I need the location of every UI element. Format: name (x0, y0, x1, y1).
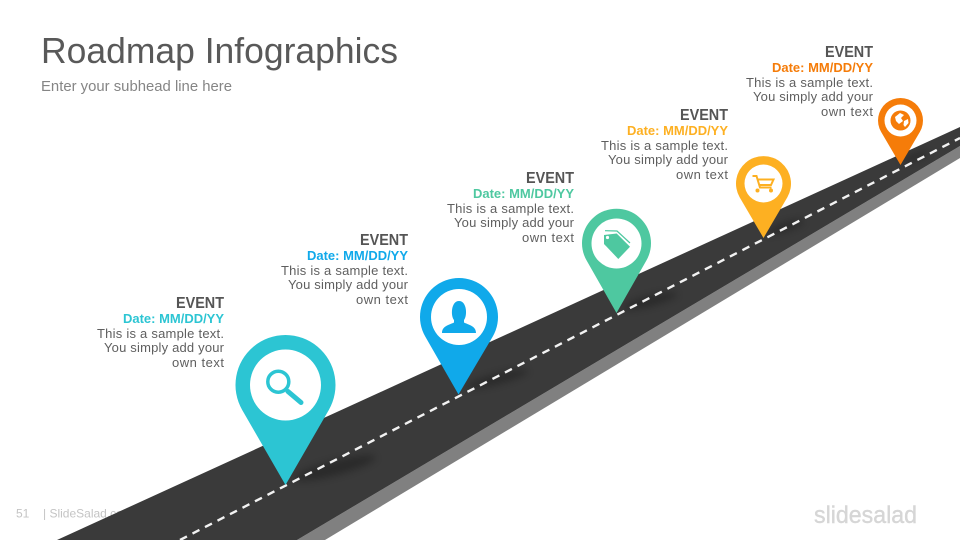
event 2 text: This is a sample text. (281, 263, 408, 278)
event 5 text: EVENT (825, 44, 873, 61)
event 3 text: EVENT (526, 170, 574, 187)
event 5 text: Date: MM/DD/YY (772, 61, 874, 75)
event 4 text: own text (676, 167, 728, 182)
event 5 text: This is a sample text. (746, 75, 873, 90)
event 2 text: own text (356, 292, 408, 307)
footer brand: | SlideSalad.com (43, 506, 133, 520)
road (57, 127, 960, 540)
event 3 text: This is a sample text. (447, 201, 574, 216)
event 1 text: This is a sample text. (97, 326, 224, 341)
pin 4: cart (736, 156, 791, 238)
event 4 text: EVENT (680, 107, 728, 124)
event 5 text: own text (821, 104, 873, 119)
event 4 text: This is a sample text. (601, 138, 728, 153)
pin 2: user (420, 278, 498, 394)
event 4 text (601, 107, 729, 182)
pin 5: globe (878, 98, 923, 165)
pin 1: search (235, 335, 336, 485)
event 2 text: EVENT (360, 232, 408, 249)
event 1 text: You simply add your (104, 340, 225, 355)
pin shadows (293, 149, 930, 486)
event 1 text (97, 295, 225, 370)
event 2 text: Date: MM/DD/YY (307, 249, 409, 263)
event 5 text: You simply add your (753, 89, 874, 104)
title: Roadmap Infographics (41, 30, 398, 71)
event 2 text (281, 232, 409, 307)
event 2 text: You simply add your (288, 277, 409, 292)
event 5 text (746, 44, 874, 119)
event 3 text: own text (522, 230, 574, 245)
road centre line (180, 138, 960, 540)
event 1 text: own text (172, 355, 224, 370)
subhead: Enter your subhead line here (41, 79, 232, 95)
logo: slidesalad (814, 502, 917, 529)
event 3 text: Date: MM/DD/YY (473, 187, 575, 201)
event 4 text: You simply add your (608, 152, 729, 167)
event 1 text: EVENT (176, 295, 224, 312)
event 3 text (447, 170, 575, 245)
page number: 51 (16, 506, 30, 520)
event 4 text: Date: MM/DD/YY (627, 124, 729, 138)
pin 3: tag (582, 209, 651, 313)
event 3 text: You simply add your (454, 215, 575, 230)
event 1 text: Date: MM/DD/YY (123, 312, 225, 326)
